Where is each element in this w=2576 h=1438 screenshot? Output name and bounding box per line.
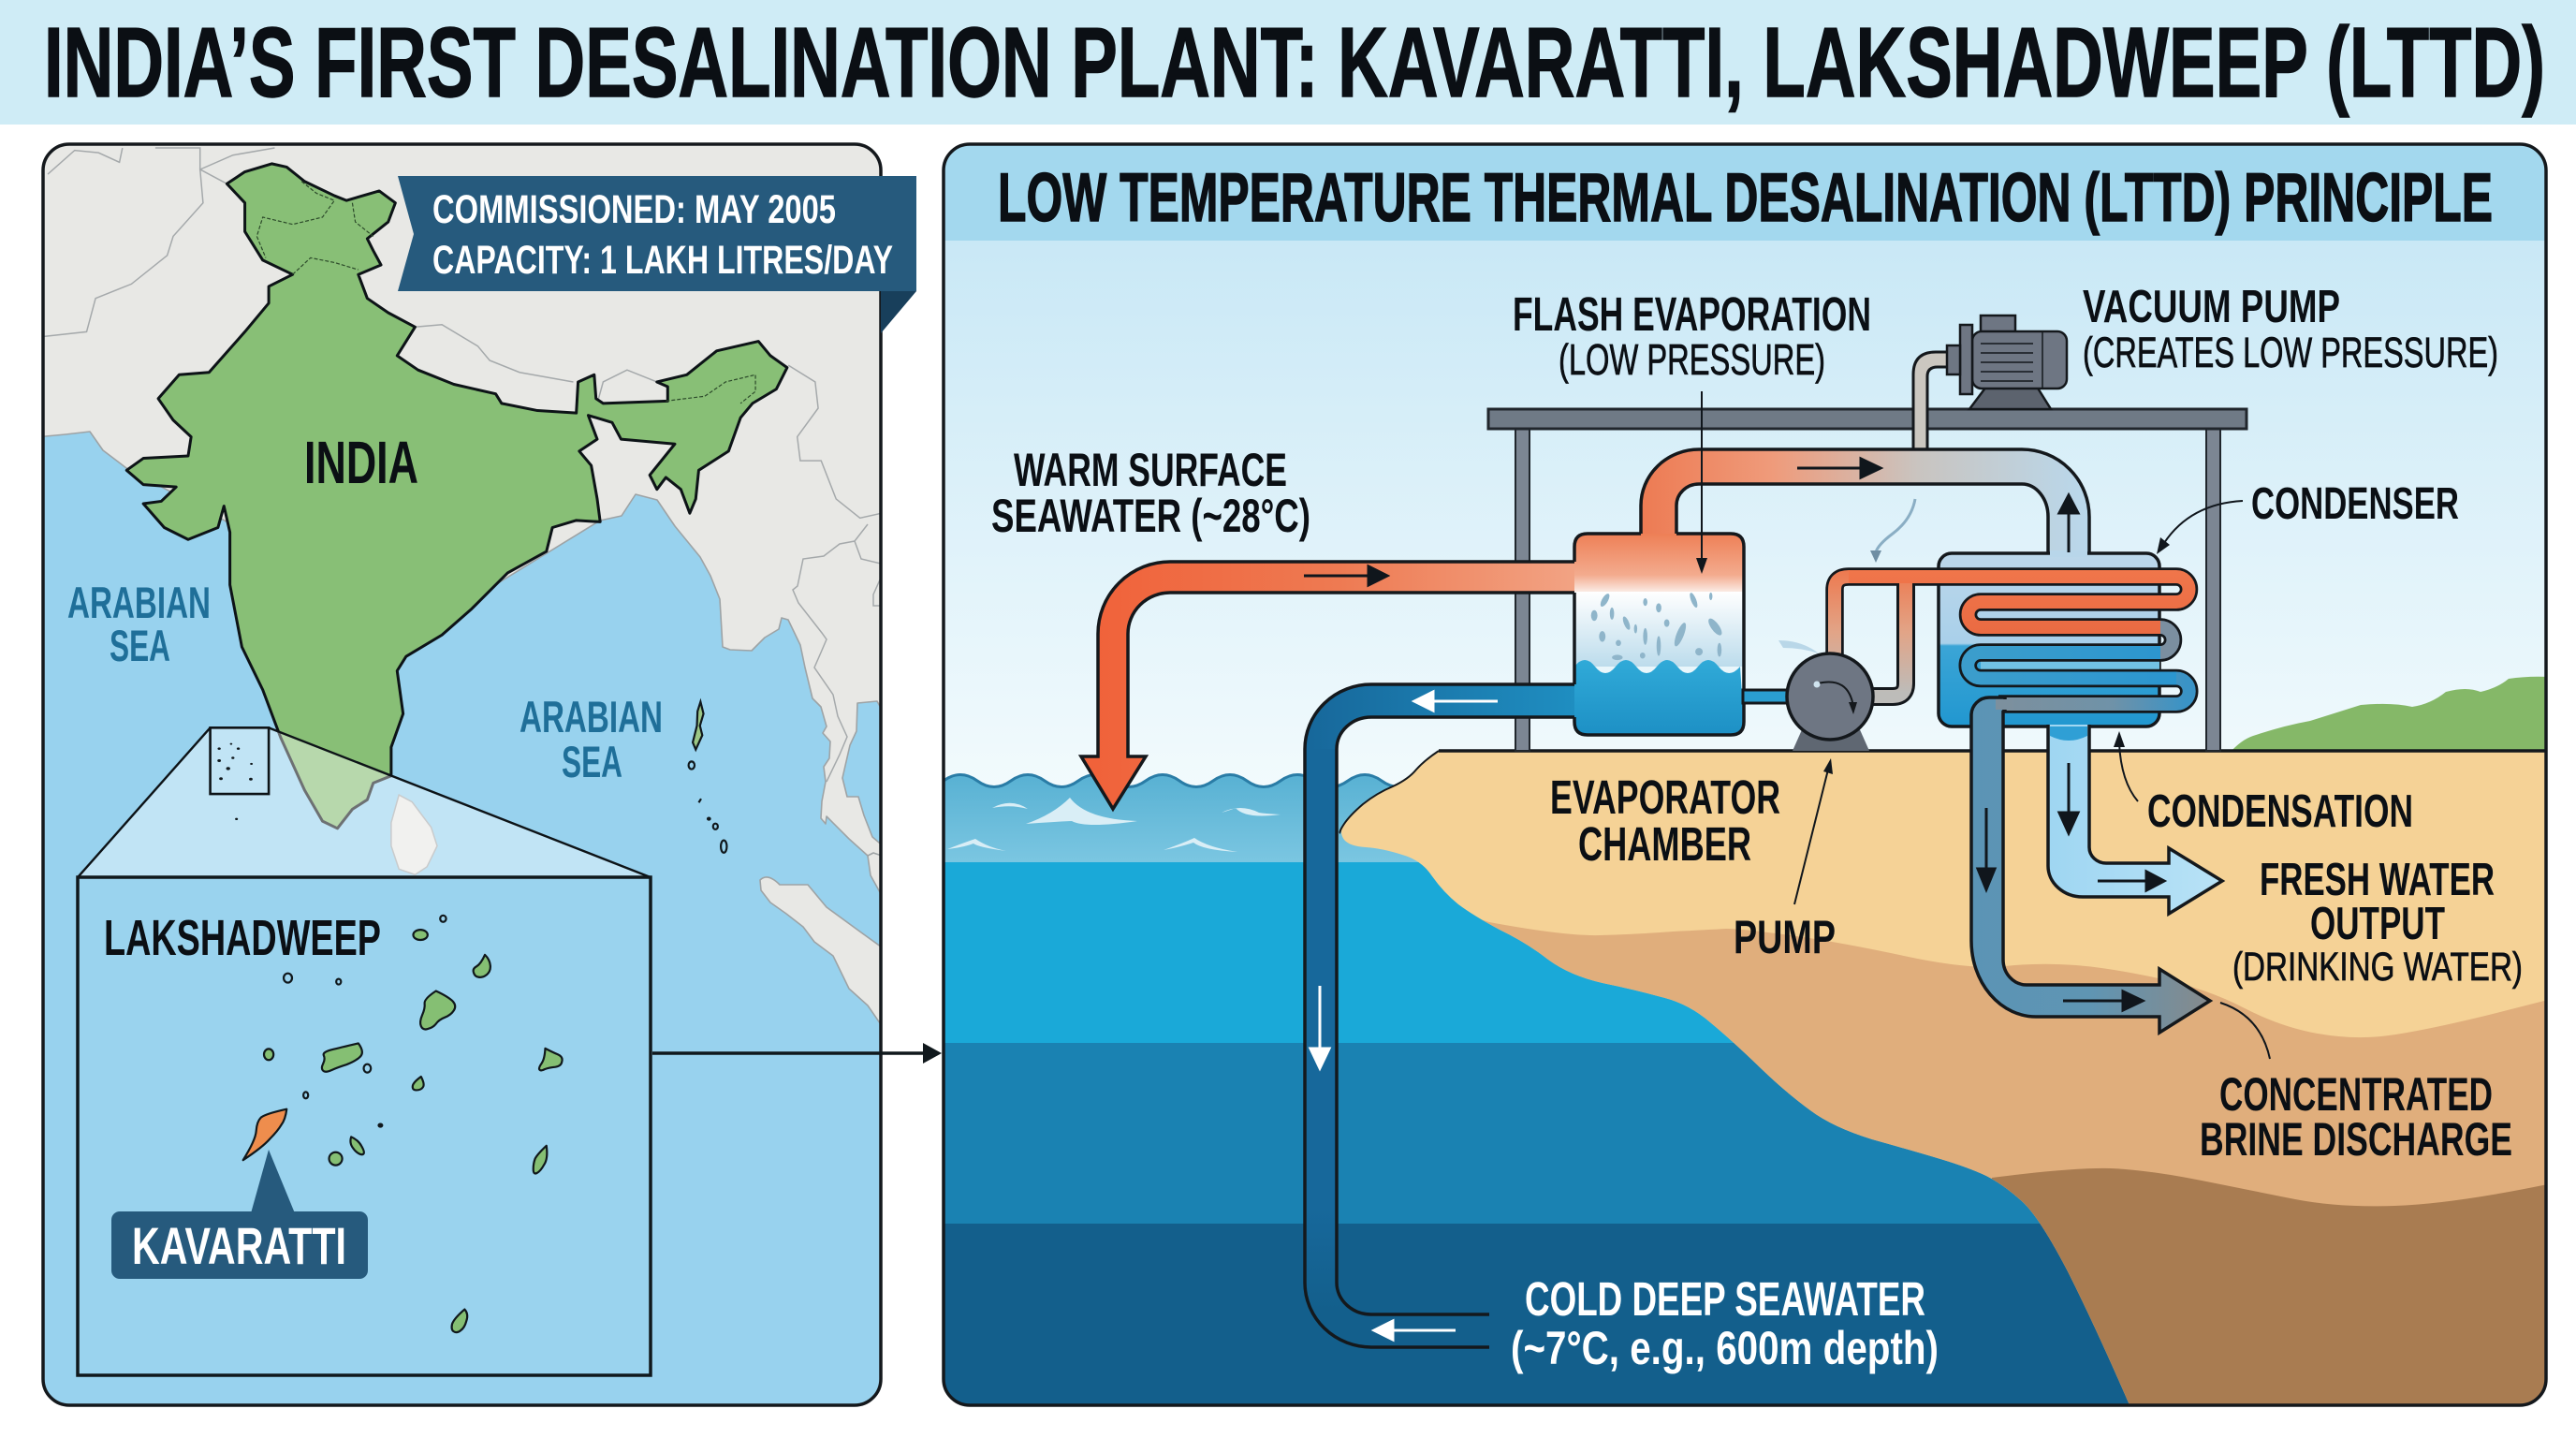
label: pump: [1734, 758, 1836, 963]
label: evaporator chamber: CHAMBER: [1578, 817, 1751, 871]
callout: commissioned and capacity: [398, 176, 916, 333]
foam: [947, 798, 1281, 852]
map: India: [126, 164, 787, 829]
callout: commissioned and capacity: CAPACITY: 1 LAKH LITRES/DAY: [432, 238, 893, 283]
label: Arabian Sea east: SEA: [562, 737, 622, 786]
vapour pipe: [1641, 449, 2089, 555]
map: eastern islands: [689, 702, 726, 853]
label: concentrated brine discharge: [2200, 1003, 2512, 1166]
map: neighbouring land: [36, 140, 885, 1030]
map: magnifier beam: [78, 727, 651, 877]
label: pump: PUMP: [1734, 911, 1836, 963]
warm seawater intake pipe: [1081, 562, 1576, 809]
panel border: [944, 144, 2546, 1405]
map: Sumatra: [760, 877, 885, 1030]
label: fresh water output: [2232, 855, 2523, 990]
evaporator chamber: [1574, 534, 1744, 735]
flow arrows: [1304, 459, 2164, 1340]
label: evaporator chamber: EVAPORATOR: [1550, 770, 1780, 824]
ocean layers: [944, 775, 2254, 1405]
label: Arabian Sea west: SEA: [110, 621, 170, 670]
label: Arabian Sea east: [520, 692, 663, 786]
label: flash evaporation: (LOW PRESSURE): [1559, 335, 1825, 384]
label: warm surface seawater: [991, 444, 1310, 542]
support frame: [1488, 409, 2247, 751]
map: peninsula tip: [867, 852, 880, 893]
label: flash evaporation: [1513, 287, 1871, 574]
label: condenser: [2157, 479, 2459, 554]
label: fresh water output: OUTPUT: [2310, 899, 2445, 949]
islands: [243, 916, 563, 1332]
label: vacuum pump: VACUUM PUMP: [2083, 282, 2340, 332]
label: cold deep seawater: [1511, 1272, 1939, 1374]
label: vacuum pump: [2083, 282, 2498, 376]
title bar: [0, 0, 2576, 125]
water droplets: [1591, 593, 1724, 660]
label: evaporator chamber: [1550, 770, 1780, 871]
panel: LTTD principle diagram: [944, 144, 2555, 1414]
vacuum line: [1913, 352, 1949, 451]
label: Lakshadweep: LAKSHADWEEP: [104, 910, 381, 966]
map: Lakshadweep locator box: [211, 727, 269, 820]
arrow: inset to principle diagram: [652, 1043, 942, 1064]
label: cold deep seawater: (~7°C, e.g., 600m depth): [1511, 1322, 1939, 1374]
callout: Kavaratti: [111, 1150, 368, 1279]
inset: Lakshadweep map: [78, 877, 651, 1375]
label: condensation: CONDENSATION: [2147, 786, 2413, 837]
condenser vessel: [1939, 550, 2159, 726]
label: condenser: CONDENSER: [2251, 479, 2459, 529]
fresh water outlet: [2048, 725, 2222, 914]
label: flash evaporation: FLASH EVAPORATION: [1513, 287, 1871, 341]
hill: [2231, 677, 2548, 752]
map: Sri Lanka: [391, 795, 437, 874]
vacuum pump: [1947, 315, 2067, 409]
label: warm surface seawater: SEAWATER (~28°C): [991, 490, 1310, 542]
panel: India location map: [36, 140, 916, 1405]
brine discharge pipe: [1971, 697, 2210, 1033]
land: strata: [1329, 749, 2555, 1414]
callout: commissioned and capacity: COMMISSIONED: MAY 2005: [432, 187, 836, 232]
label: cold deep seawater: COLD DEEP SEAWATER: [1525, 1272, 1925, 1326]
label: Arabian Sea west: [67, 578, 211, 670]
circulation pump: [1743, 577, 2189, 751]
map panel border: [43, 144, 881, 1405]
callout: Kavaratti: KAVARATTI: [132, 1216, 346, 1275]
cold deep seawater pipe: [1305, 684, 1576, 1347]
label: warm surface seawater: WARM SURFACE: [1014, 444, 1287, 496]
label: condensation: [2114, 731, 2413, 837]
heat exchange coil: [1835, 577, 2189, 704]
label: Arabian Sea east: ARABIAN: [520, 692, 663, 741]
label: INDIA: INDIA: [304, 429, 418, 496]
label: Arabian Sea west: ARABIAN: [67, 578, 211, 627]
header band: [944, 144, 2546, 241]
